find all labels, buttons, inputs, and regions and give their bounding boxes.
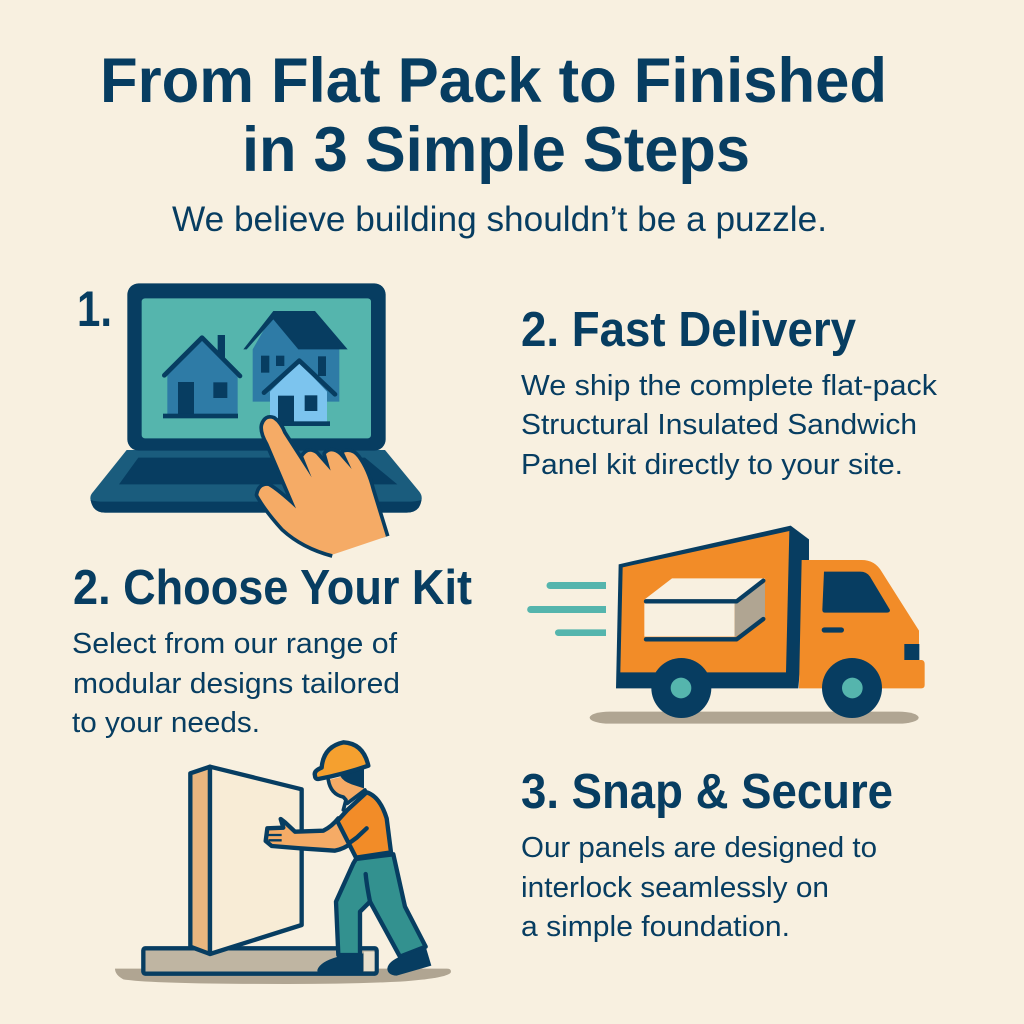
icon: large house [243,311,348,402]
worker legs [317,854,431,976]
worker head and helmet [315,742,368,810]
speed lines [527,582,606,636]
wall panel [190,767,302,954]
step 1 number: 1. [77,281,112,337]
step 3 body text: a simple foundation. [521,911,790,943]
icon: delivery truck [527,526,925,724]
icon: pointing hand [258,419,386,554]
flat-pack panel box [644,578,765,639]
worker arm [266,818,351,851]
title: From Flat Pack to Finished [100,46,887,116]
truck shadow [590,712,919,724]
choose your kit body text [72,628,400,739]
cargo box body [616,526,809,688]
laptop screen [127,283,386,451]
laptop base [90,450,422,513]
step 3 heading: 3. Snap & Secure [521,765,893,819]
step 2 body text: Panel kit directly to your site. [521,449,903,481]
icon: small blue house [264,361,335,426]
worker torso [337,792,391,858]
subtitle: We believe building shouldn’t be a puzzle. [172,200,827,239]
worker fingers [268,835,282,840]
step 3 body text: Our panels are designed to [521,832,877,864]
title [100,46,887,185]
cab [799,560,925,688]
choose your kit body text: to your needs. [72,707,260,739]
step heading: Choose Your Kit: 2. Choose Your Kit [73,561,472,615]
icon: worker placing panel on foundation [115,742,451,984]
step 3 body text: interlock seamlessly on [521,872,829,904]
ground shadow [115,969,451,984]
icon: laptop with houses and pointing hand [90,283,422,554]
choose your kit body text: Select from our range of [72,628,398,660]
step 2 body text: Structural Insulated Sandwich [521,409,917,441]
foundation slab [143,948,377,974]
step 2 body text: We ship the complete flat-pack [521,370,938,402]
wheels [651,658,882,718]
title: in 3 Simple Steps [242,115,750,185]
choose your kit body text: modular designs tailored [73,668,400,700]
step 2 body text [521,370,938,481]
icon: left house [163,335,240,418]
step 3 body text [521,832,877,943]
step 2 heading: Fast Delivery: 2. Fast Delivery [521,303,856,357]
